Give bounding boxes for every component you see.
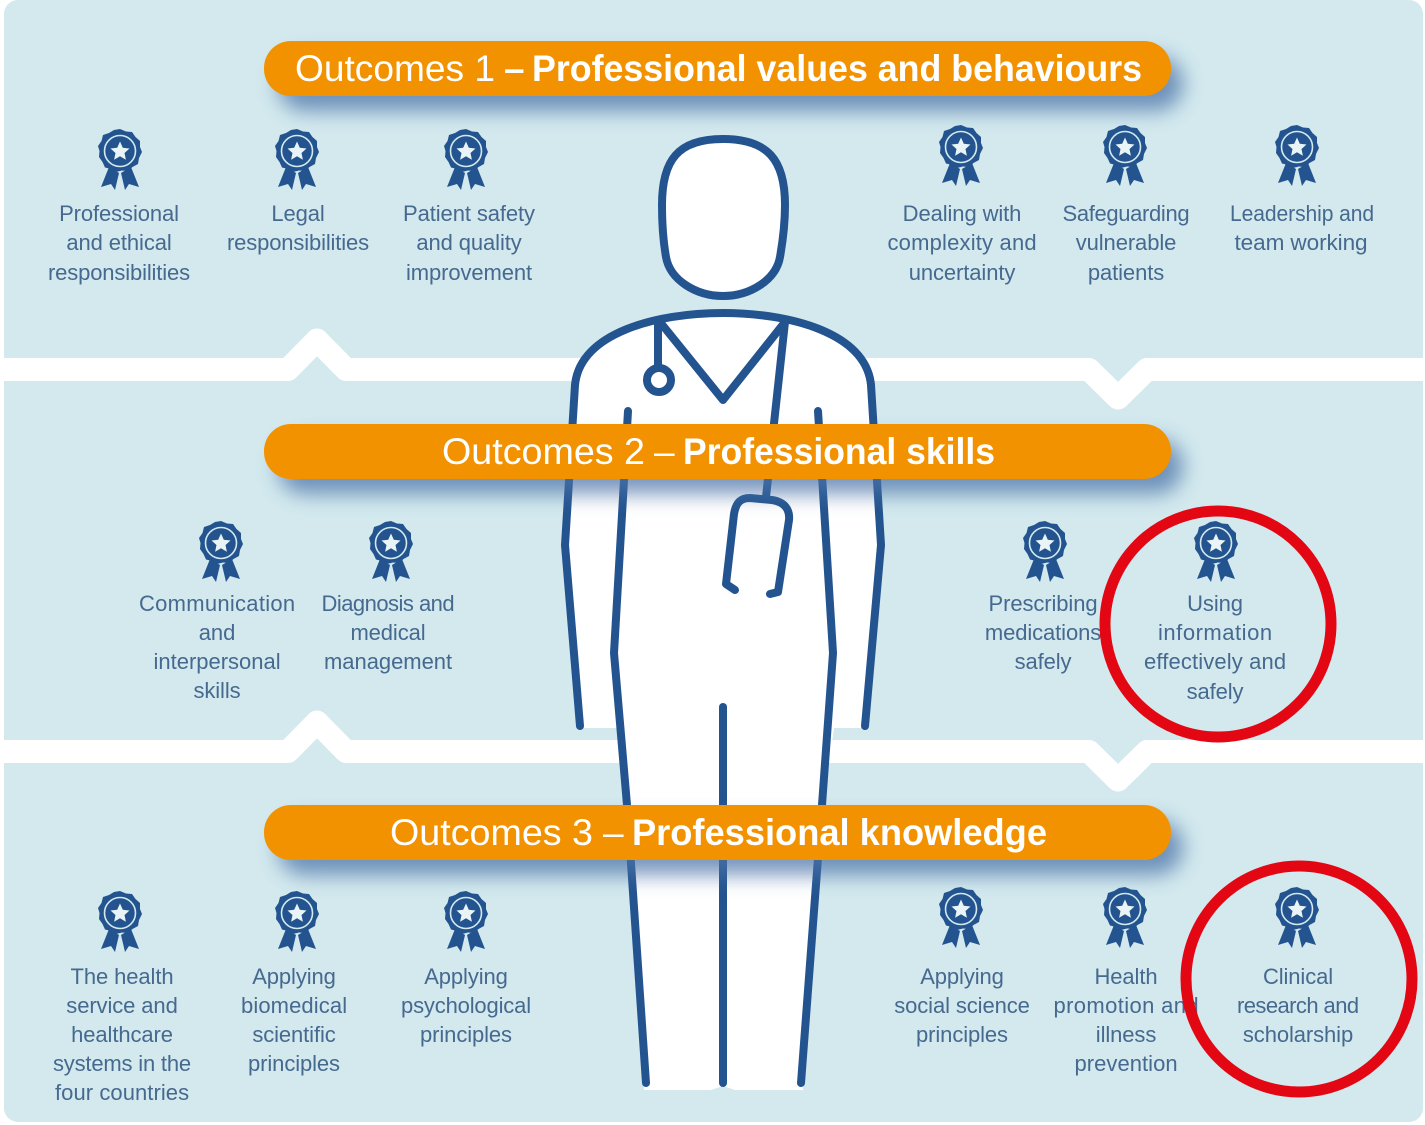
outcome: The health service and healthcare systems in the four countries: four countries	[55, 1080, 189, 1105]
outcome: Applying social science principles: principles	[916, 1022, 1008, 1047]
outcome: Leadership and team working: team working	[1234, 230, 1368, 255]
doctor figure	[563, 139, 883, 1090]
outcome: Legal responsibilities: responsibilities	[227, 230, 369, 255]
outcome: Applying psychological principles: psychological	[401, 993, 531, 1018]
outcome: Safeguarding vulnerable patients	[1062, 125, 1190, 285]
outcome: Safeguarding vulnerable patients: vulnerable	[1076, 230, 1176, 255]
banner: Outcomes 3	[264, 805, 1183, 875]
outcome: Professional and ethical responsibilities: Professional	[59, 201, 179, 226]
outcome: The health service and healthcare systems in the four countries	[53, 891, 191, 1105]
banner: Outcomes 3: –	[603, 812, 624, 853]
outcome: Using information effectively and safely: information	[1158, 620, 1272, 645]
outcome: Prescribing medications safely	[985, 521, 1101, 674]
outcome: Communication and interpersonal skills: interpersonal	[154, 649, 280, 674]
banner: Outcomes 1: Professional values and behaviours	[532, 48, 1142, 89]
outcome: Applying biomedical scientific principles: Applying	[252, 964, 336, 989]
outcome: Dealing with complexity and uncertainty	[888, 125, 1036, 285]
outcome: Dealing with complexity and uncertainty: Dealing with	[903, 201, 1021, 226]
red highlight circle: Clinical research	[1186, 866, 1412, 1092]
outcome: Health promotion and illness prevention: illness	[1096, 1022, 1156, 1047]
banner: Outcomes 1	[264, 41, 1183, 111]
outcome: Health promotion and illness prevention: promotion and	[1054, 993, 1198, 1018]
outcome: Patient safety and quality improvement: improvement	[406, 260, 532, 285]
banner: Outcomes 2	[264, 424, 1183, 494]
banner: Outcomes 2: Outcomes 2	[442, 431, 645, 472]
outcome: Prescribing medications safely: safely	[1015, 649, 1072, 674]
banner: Outcomes 2: –	[654, 431, 675, 472]
outcome: Safeguarding vulnerable patients: patients	[1088, 260, 1164, 285]
banner: Outcomes 1: Outcomes 1	[295, 48, 495, 89]
outcome: Diagnosis and medical management: medical	[350, 620, 426, 645]
outcome: Health promotion and illness prevention: Health	[1094, 964, 1158, 989]
outcome: Using information effectively and safely: safely	[1187, 679, 1244, 704]
outcome: Professional and ethical responsibilities: and ethical	[66, 230, 172, 255]
outcome: Legal responsibilities	[227, 129, 369, 255]
outcome: Leadership and team working	[1230, 125, 1374, 255]
outcome: Communication and interpersonal skills: Communication	[139, 591, 295, 616]
outcome: Applying biomedical scientific principles: principles	[248, 1051, 340, 1076]
outcome: Clinical research and scholarship: research and	[1237, 993, 1359, 1018]
white body	[563, 311, 883, 1090]
outcome: Dealing with complexity and uncertainty: complexity and	[888, 230, 1036, 255]
outcome: Prescribing medications safely: medications	[985, 620, 1101, 645]
outcome: Communication and interpersonal skills: and	[199, 620, 235, 645]
outcome: Prescribing medications safely: Prescribing	[989, 591, 1097, 616]
outcome: The health service and healthcare systems in the four countries: The health	[71, 964, 173, 989]
coat outline	[565, 313, 881, 1083]
outcome: Communication and interpersonal skills: skills	[193, 678, 241, 703]
outcome: Patient safety and quality improvement	[403, 129, 535, 285]
outcome: Using information effectively and safely: Using	[1187, 591, 1243, 616]
outcome: Applying psychological principles: principles	[420, 1022, 512, 1047]
outcome: Using information effectively and safely	[1144, 521, 1286, 704]
outcome: Patient safety and quality improvement: and quality	[416, 230, 522, 255]
outcome: Applying social science principles: Applying	[920, 964, 1004, 989]
outcome: Clinical research and scholarship: Clinical	[1263, 964, 1333, 989]
banner: Outcomes 2: Professional skills	[683, 431, 995, 472]
outcome: Applying psychological principles	[401, 891, 531, 1047]
stethoscope	[647, 322, 789, 594]
outcome: Diagnosis and medical management: Diagnosis and	[322, 591, 454, 616]
outcome: The health service and healthcare systems in the four countries: healthcare	[71, 1022, 173, 1047]
outcome: Clinical research and scholarship	[1237, 887, 1359, 1047]
banner: Outcomes 3: Outcomes 3	[390, 812, 593, 853]
outcome: The health service and healthcare systems in the four countries: systems in the	[53, 1051, 191, 1076]
head	[662, 139, 785, 296]
outcome: Patient safety and quality improvement: Patient safety	[403, 201, 535, 226]
outcome: Dealing with complexity and uncertainty: uncertainty	[909, 260, 1015, 285]
banner: Outcomes 1: –	[504, 48, 525, 89]
outcome: Diagnosis and medical management	[322, 521, 454, 674]
outcome: Safeguarding vulnerable patients: Safeguarding	[1062, 201, 1190, 226]
outcome: Health promotion and illness prevention: prevention	[1074, 1051, 1178, 1076]
outcome: Leadership and team working: Leadership and	[1230, 201, 1374, 226]
outcome: Diagnosis and medical management: management	[324, 649, 452, 674]
outcome: Applying biomedical scientific principles	[241, 891, 347, 1076]
outcome: Communication and interpersonal skills	[139, 521, 295, 703]
outcome: Applying biomedical scientific principles: scientific	[252, 1022, 336, 1047]
outcome: Professional and ethical responsibilities	[48, 129, 190, 285]
outcome: Legal responsibilities: Legal	[271, 201, 325, 226]
divider between outcomes 1 and 2	[0, 340, 1425, 398]
outcome: Applying biomedical scientific principles: biomedical	[241, 993, 347, 1018]
divider between outcomes 2 and 3	[0, 722, 1425, 780]
outcome: Using information effectively and safely: effectively and	[1144, 649, 1286, 674]
outcome: Health promotion and illness prevention	[1054, 887, 1198, 1076]
outcome: Applying psychological principles: Applying	[424, 964, 508, 989]
outcome: Applying social science principles	[894, 887, 1030, 1047]
outcome: The health service and healthcare systems in the four countries: service and	[66, 993, 178, 1018]
outcome: Clinical research and scholarship: scholarship	[1243, 1022, 1353, 1047]
outcome: Applying social science principles: social science	[894, 993, 1030, 1018]
banner: Outcomes 3: Professional knowledge	[632, 812, 1047, 853]
outcome: Professional and ethical responsibilities: responsibilities	[48, 260, 190, 285]
red highlight circle: Using information	[1105, 511, 1331, 737]
